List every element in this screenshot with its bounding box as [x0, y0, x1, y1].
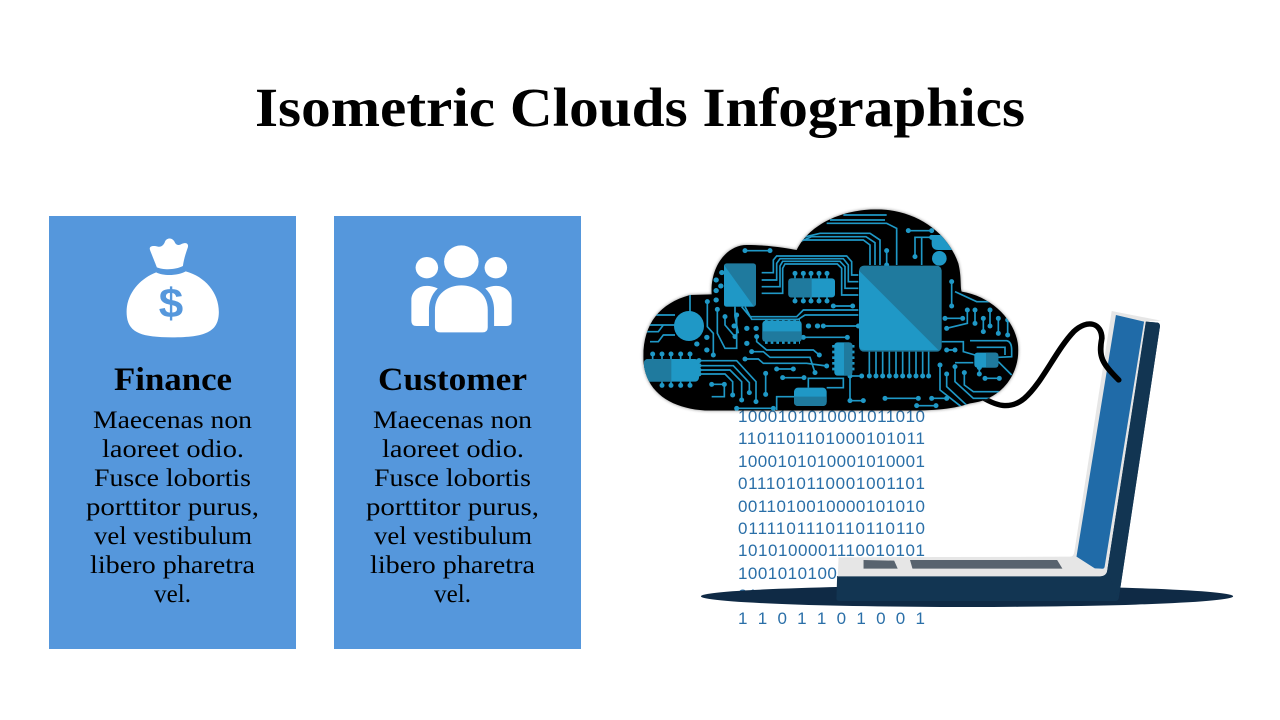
text block: finance: Fusce lobortis [94, 465, 251, 492]
small chips [644, 235, 998, 406]
text block: finance [86, 407, 259, 608]
text block: finance: libero pharetra [90, 552, 255, 579]
binary data stream: 1000101010001010001 [738, 452, 925, 471]
icon: people [411, 245, 512, 332]
heading: finance: Finance [114, 362, 232, 398]
text block: customer: porttitor purus, [366, 494, 539, 521]
text block: customer [366, 407, 539, 608]
title: Isometric Clouds Infographics [255, 77, 1025, 138]
text block: customer: libero pharetra [370, 552, 535, 579]
text block: customer: Fusce lobortis [374, 465, 531, 492]
binary data stream: 1 1 0 1 1 0 1 0 0 1 [738, 609, 925, 628]
chip pins [653, 273, 929, 385]
text block: customer: Maecenas non [373, 407, 533, 434]
text block: finance: Maecenas non [93, 407, 253, 434]
text block: finance: laoreet odio. [102, 436, 244, 463]
panel: customer [334, 216, 581, 649]
laptop body [836, 311, 1161, 601]
binary data stream: 1101101101000101011 [738, 429, 925, 448]
text block: finance: porttitor purus, [86, 494, 259, 521]
binary data stream: 1000101010001011010 [738, 407, 925, 426]
binary data stream [738, 407, 925, 628]
heading: customer: Customer [378, 362, 527, 398]
laptop illustration [701, 311, 1233, 607]
text block: customer: laoreet odio. [382, 436, 524, 463]
text block: customer: vel vestibulum [374, 523, 533, 550]
icon: money bag [127, 239, 219, 337]
text block: finance: vel. [154, 581, 191, 608]
main processor chip [859, 266, 942, 352]
binary data stream: 1001010100101010110 [738, 564, 925, 583]
ground shadow [701, 586, 1233, 607]
dollar sign: $ [159, 280, 183, 327]
panel: finance [49, 216, 296, 649]
cloud with circuit board [640, 207, 1020, 413]
binary data stream: 0011010010000101010 [738, 497, 925, 516]
binary data stream: 0101101010010101101 [738, 586, 925, 605]
text block: finance: vel vestibulum [94, 523, 253, 550]
binary data stream: 0111101110110110110 [738, 519, 925, 538]
text block: customer: vel. [434, 581, 471, 608]
cable [979, 324, 1119, 406]
binary data stream: 0111010110001001101 [738, 474, 925, 493]
binary data stream: 1010100001110010101 [738, 541, 925, 560]
circuit traces [697, 231, 1010, 408]
